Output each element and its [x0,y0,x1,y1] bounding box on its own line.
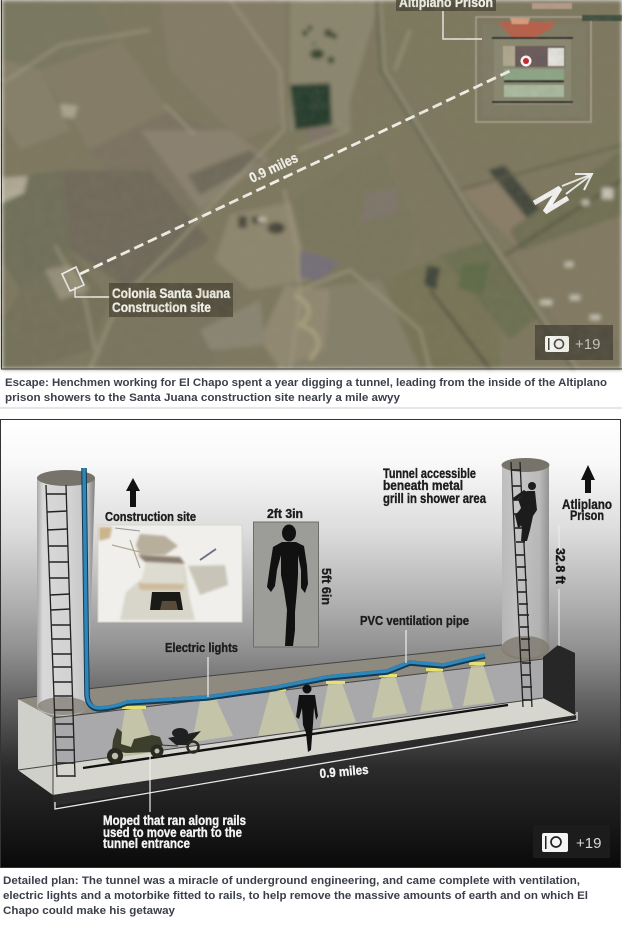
marker: construction site square [62,267,84,291]
tunnel route dashed line [80,70,512,274]
tunnel structure [18,645,577,806]
roads [0,0,430,369]
label: Atliplano Prison: Atliplano [562,497,612,512]
light cones [117,664,495,758]
label: Construction site: Construction site [105,509,196,524]
left ladder [46,485,75,777]
caption: detailed plan [3,875,588,917]
label: 0.9 miles: 0.9 miles [319,762,369,781]
wheelbarrow [168,731,201,745]
panel: aerial satellite photo [0,0,622,370]
back wall [53,659,543,767]
icon: moped and wheelbarrow [107,728,201,764]
arrow: to prison [581,465,595,493]
left end wall [18,699,53,795]
caption: detailed plan: Chapo could make his getaway [3,905,176,917]
PVC ventilation pipe [84,468,485,709]
trees [290,83,332,130]
floor front edge [53,715,577,806]
icon: climbing man silhouette [513,482,537,541]
arrow: to Construction site [126,478,140,507]
camera badge +19 on diagram: +19 [576,835,601,852]
lamps [122,662,485,709]
caption: detailed plan: electric lights and a motorbike fitted to rails, to help remove the massive amounts of earth and on which El [3,890,588,902]
label: Colonia Santa Juana Construction site: Construction site [112,299,211,315]
label: 32.8 ft [553,525,568,646]
leader: construction site [75,287,110,297]
houses [540,188,613,320]
ceiling surface [18,645,543,718]
buildings near the route [238,216,285,234]
label: PVC ventilation pipe [360,613,469,663]
camera badge +19 on map: +19 [575,336,600,353]
label: Tunnel accessible note: beneath metal [383,478,463,493]
icon: standing man silhouette [267,524,308,646]
label: Colonia Santa Juana Construction site [109,283,233,317]
dimension line: tunnel length [55,712,577,809]
left shaft cylinder [37,470,95,716]
camera badge +19 on diagram [533,825,610,858]
camera badge +19 on map [535,325,613,360]
icon: walking man in tunnel [296,684,318,752]
label: Electric lights: Electric lights [165,640,238,655]
prison compound [476,3,622,122]
label: 32.8 ft: 32.8 ft [553,548,568,585]
caption: escape: prison showers to the Santa Juana construction site nearly a mile awyy [5,392,401,404]
right ladder [511,462,532,707]
right shaft cylinder [502,458,550,660]
label: 5ft 6in: 5ft 6in [319,568,334,605]
photo: tunnel entrance [98,525,242,622]
icon: north arrow [534,174,592,212]
caption: escape: Escape: Henchmen working for El Chapo spent a year digging a tunnel, leading from the inside of the Altiplano [5,377,607,389]
label: Atliplano Prison [562,497,612,523]
label: Electric lights [165,640,238,697]
aerial ground texture [0,0,622,369]
label: 2ft 3in: 2ft 3in [267,506,303,521]
label: 0.9 miles on map: 0.9 miles [247,149,301,186]
label: Tunnel accessible note [383,466,486,506]
tunnel floor [18,698,577,795]
rail [83,705,508,768]
leader: Altiplano Prison [443,11,482,39]
label: Tunnel accessible note: grill in shower area [383,491,486,506]
label: moped note: used to move earth to the [103,825,242,840]
prison marker [520,56,532,66]
caption: detailed plan: Detailed plan: The tunnel was a miracle of underground engineering, and came complete with ventilation, [3,875,580,887]
label: moped note: tunnel entrance [103,836,190,851]
label: Tunnel accessible note: Tunnel accessible [383,466,476,481]
panel: tunnel cross section with man [254,522,318,647]
panel: tunnel diagram [0,420,620,868]
right end block [543,645,575,715]
caption: escape [5,377,607,404]
label: moped note [103,755,246,851]
label: moped note: Moped that ran along rails [103,813,246,828]
label: Colonia Santa Juana Construction site: Colonia Santa Juana [112,285,230,301]
label: Atliplano Prison: Prison [570,508,604,523]
label: PVC ventilation pipe: PVC ventilation pipe [360,613,469,628]
